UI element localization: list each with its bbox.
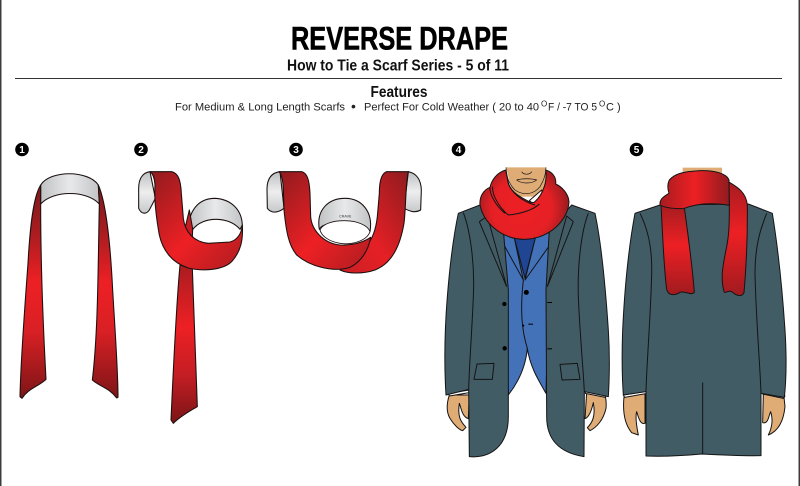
coat [622, 204, 786, 456]
figure 4: front view of man wearing scarf [445, 167, 609, 457]
figure 2: one end looped around the neck [139, 172, 243, 423]
gray flap [139, 172, 155, 213]
features text: O [599, 100, 605, 108]
features text: Perfect For Cold Weather ( 20 to 40 [364, 102, 539, 114]
tag: CRAVE [339, 215, 352, 219]
features text: F / -7 TO 5 [548, 102, 597, 114]
scarf folds [490, 180, 539, 215]
gray ring [319, 198, 371, 232]
step number badges [15, 143, 643, 156]
coat [445, 205, 508, 457]
neck [683, 168, 722, 177]
coat seams, lapels and buttons [463, 213, 588, 392]
vest [503, 230, 550, 395]
right hand [585, 393, 606, 431]
title: REVERSE DRAPE [291, 20, 508, 56]
figure 1: scarf draped around neck [20, 174, 118, 398]
step number badges: 5 [634, 145, 640, 156]
coat seams [640, 213, 767, 454]
right scarf end [722, 182, 747, 296]
features text: O [541, 100, 547, 108]
features text: C ) [606, 102, 621, 114]
hands [624, 393, 645, 435]
step number badges: 1 [19, 145, 25, 156]
features text: For Medium & Long Length Scarfs [175, 102, 346, 114]
step number badges: 2 [138, 145, 144, 156]
step number badges: 3 [293, 145, 299, 156]
face [506, 167, 547, 197]
tie [514, 237, 536, 278]
vest lapels [503, 232, 549, 280]
features heading: Features [370, 84, 428, 101]
divider line [15, 78, 782, 79]
step number badges: 4 [456, 145, 462, 156]
red band [150, 172, 243, 270]
hanging strand [171, 265, 197, 423]
left hand [447, 395, 469, 431]
left band [279, 172, 371, 269]
right band [340, 172, 408, 273]
buttons [502, 290, 552, 350]
gray ring [188, 198, 242, 230]
figure 3: both ends crossed [267, 172, 421, 273]
cuffs [623, 391, 785, 398]
figure 5: back view of man wearing scarf [622, 168, 786, 456]
wrapped scarf [480, 170, 569, 239]
cuffs [449, 390, 606, 397]
gray flaps [267, 172, 284, 212]
left scarf end [661, 205, 694, 295]
coat pockets [474, 363, 580, 380]
features text [175, 98, 621, 114]
subtitle: How to Tie a Scarf Series - 5 of 11 [287, 58, 509, 74]
shirt collar [529, 190, 543, 205]
features text: • [351, 98, 356, 114]
scarf around neck [660, 171, 729, 209]
